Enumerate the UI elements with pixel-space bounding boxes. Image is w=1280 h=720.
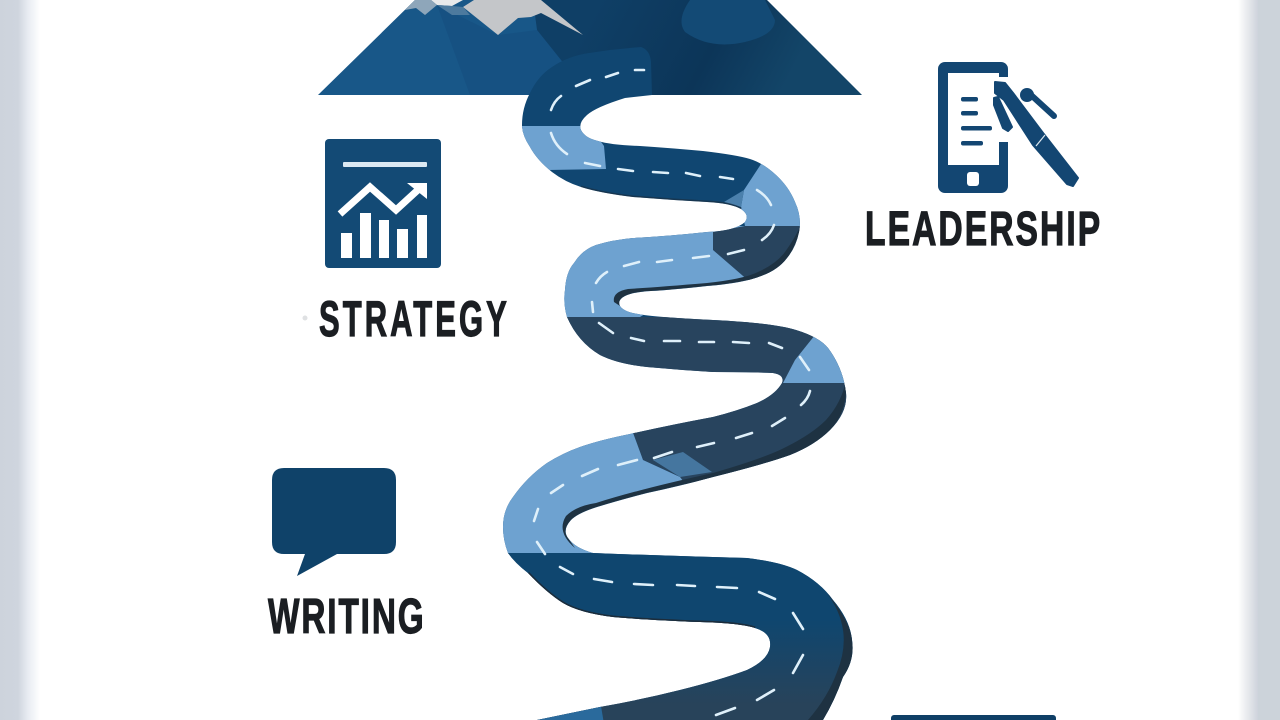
label: strategy: STRATEGY — [319, 290, 507, 347]
icon: cropped panel at bottom right — [891, 715, 1056, 720]
winding road — [503, 47, 853, 720]
label: leadership: LEADERSHIP — [865, 201, 1100, 255]
icon: strategy chart — [325, 139, 441, 268]
icon: phone and pen — [938, 62, 1078, 193]
label: writing: WRITING — [268, 589, 424, 644]
mountain range — [318, 0, 862, 95]
road centre dashes — [534, 70, 810, 715]
icon: speech bubble — [272, 468, 396, 576]
smudge near strategy label — [302, 316, 308, 320]
